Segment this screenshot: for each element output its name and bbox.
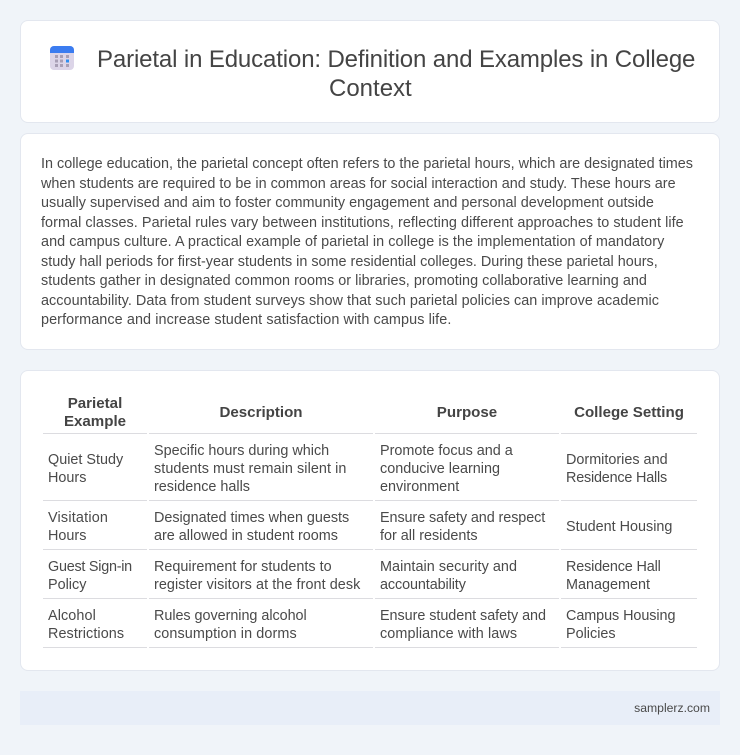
paragraph text: study hall periods for first-year students in some residential colleges. During these parietal hours, [41,254,658,270]
row: alcohol restrictions: Ensure student safety and [380,608,546,624]
paragraph text: accountability. Data from student surveys show that such parietal policies can improve academic [41,292,659,308]
paragraph text: formal classes. Parietal rules vary between institutions, reflecting different approaches to student life [41,214,684,230]
paragraph text [41,156,693,328]
intro paragraph card [20,133,720,350]
title text: Parietal in Education: Definition and Examples in College [97,46,695,73]
row: guest sign-in policy: Guest Sign-in [48,559,132,575]
row: guest sign-in policy: Maintain security and [380,559,517,575]
row: alcohol restrictions: compliance with laws [380,626,517,642]
row: quiet study hours: Hours [48,470,86,486]
table header: Purpose [437,404,497,421]
table header: College Setting [574,404,684,421]
title card [20,20,720,123]
paragraph text: when students are required to be in common areas for social interaction and study. These hours are [41,176,676,192]
row: quiet study hours: Promote focus and a [380,443,513,459]
row: visitation hours: for all residents [380,528,478,544]
icon: calendar [50,46,74,70]
row: alcohol restrictions: Restrictions [48,626,124,642]
table card [20,370,720,671]
row: guest sign-in policy: register visitors at the front desk [154,577,360,593]
paragraph text: and campus culture. A practical example of parietal in college is the implementation of mandatory [41,234,664,250]
row: guest sign-in policy [48,559,661,593]
row: alcohol restrictions [48,608,675,642]
row: visitation hours: are allowed in student rooms [154,528,338,544]
paragraph text: In college education, the parietal concept often refers to the parietal hours, which are designated times [41,156,693,172]
row: visitation hours: Hours [48,528,86,544]
row: guest sign-in policy: Requirement for students to [154,559,332,575]
row: alcohol restrictions: Rules governing alcohol [154,608,307,624]
row: quiet study hours: Quiet Study [48,452,123,468]
row: alcohol restrictions: Policies [566,626,616,642]
table [43,395,697,648]
row: alcohol restrictions: Alcohol [48,608,96,624]
paragraph text: students gather in designated common rooms or libraries, promoting collaborative learning and [41,273,647,289]
footer source text: samplerz.com [634,701,710,715]
row: guest sign-in policy: Management [566,577,650,593]
row: guest sign-in policy: Policy [48,577,86,593]
row: quiet study hours: residence halls [154,479,250,495]
row: guest sign-in policy: accountability [380,577,466,593]
footer bar [20,691,720,725]
table header [64,395,684,430]
row: visitation hours [48,510,672,544]
row: quiet study hours: conducive learning [380,461,500,477]
row: quiet study hours: Dormitories and [566,452,668,468]
table header: Parietal [68,395,122,412]
row: visitation hours: Student Housing [566,519,672,535]
row: visitation hours: Ensure safety and respect [380,510,545,526]
row: alcohol restrictions: consumption in dorms [154,626,297,642]
title text: Context [329,75,412,102]
row: guest sign-in policy: Residence Hall [566,559,661,575]
row: quiet study hours: Residence Halls [566,470,667,486]
table header: Example [64,413,126,430]
row: quiet study hours [48,443,668,495]
paragraph text: usually supervised and aim to foster community engagement and personal development outside [41,195,654,211]
row: visitation hours: Designated times when guests [154,510,349,526]
table header: Description [219,404,303,421]
row: quiet study hours: students must remain silent in [154,461,346,477]
row: quiet study hours: Specific hours during which [154,443,329,459]
row: quiet study hours: environment [380,479,459,495]
paragraph text: performance and increase student satisfaction with campus life. [41,312,451,328]
row: visitation hours: Visitation [48,510,108,526]
row: alcohol restrictions: Campus Housing [566,608,675,624]
title text [97,46,695,102]
